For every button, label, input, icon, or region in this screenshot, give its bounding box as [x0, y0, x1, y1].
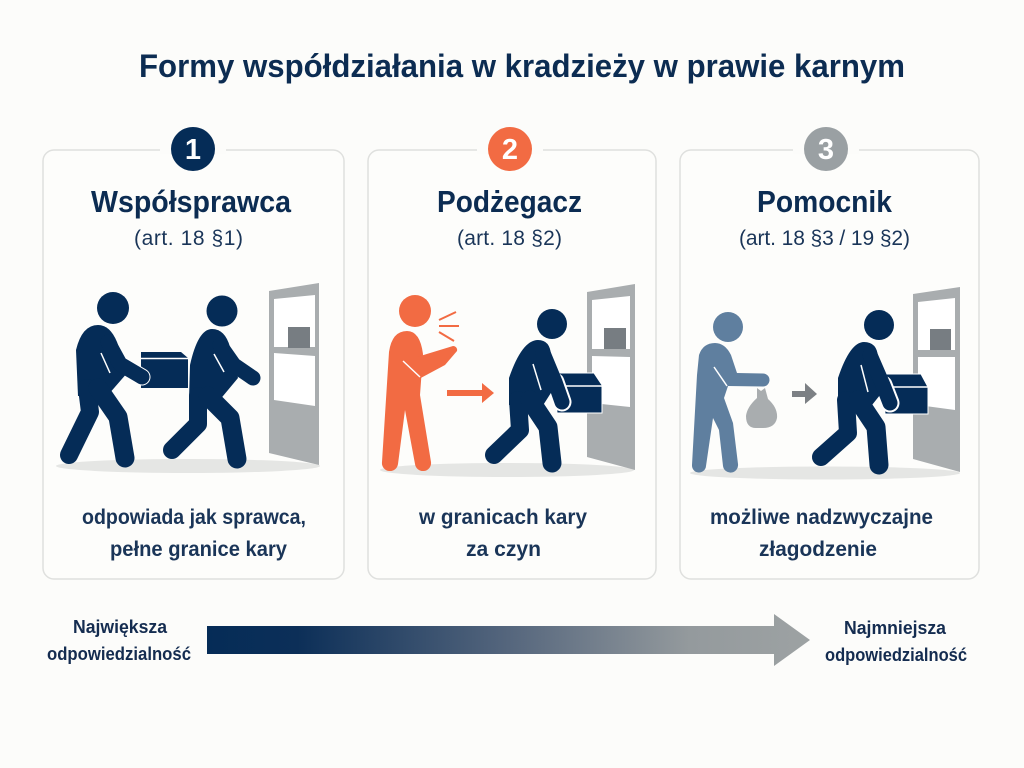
heading: Podżegacz: Podżegacz — [437, 184, 582, 219]
illustration: two people carrying a box — [56, 283, 320, 473]
article reference 2: (art. 18 §2) — [457, 227, 562, 250]
thief carrying box — [821, 310, 928, 465]
thief carrying box — [494, 309, 602, 463]
person left — [69, 292, 142, 458]
left label: greatest responsibility — [47, 617, 191, 664]
badge 3 — [804, 127, 848, 171]
illustration: instigator pointing at thief — [380, 284, 635, 477]
helper figure — [692, 312, 770, 473]
arrow: responsibility scale — [207, 614, 810, 666]
speech lines — [439, 312, 459, 341]
description 3 — [710, 506, 933, 561]
left label: greatest responsibility: odpowiedzialność — [47, 644, 191, 664]
description 2: za czyn — [466, 538, 541, 561]
badge 3: 3 — [818, 134, 834, 166]
arrow: gray — [792, 383, 817, 404]
panel: podżegacz — [368, 127, 656, 579]
instigator figure — [382, 295, 457, 471]
shelf — [587, 284, 635, 470]
shelf — [913, 287, 960, 472]
title: Formy współdziałania w kradzieży w prawie karnym — [139, 48, 905, 84]
right label: least responsibility: odpowiedzialność — [825, 645, 967, 665]
description 1: odpowiada jak sprawca, — [82, 506, 306, 529]
description 2 — [418, 506, 587, 561]
article reference 3: (art. 18 §3 / 19 §2) — [739, 227, 910, 250]
heading: Współsprawca: Współsprawca — [91, 184, 292, 219]
right label: least responsibility: Najmniejsza — [844, 618, 947, 638]
shelf — [269, 283, 319, 465]
description 2: w granicach kary — [418, 506, 587, 529]
description 3: złagodzenie — [759, 538, 877, 561]
left label: greatest responsibility: Największa — [73, 617, 168, 637]
description 1 — [82, 506, 306, 561]
article reference 1: (art. 18 §1) — [134, 227, 243, 250]
badge 2 — [488, 127, 532, 171]
heading: Pomocnik: Pomocnik — [757, 184, 893, 219]
description 1: pełne granice kary — [110, 538, 287, 561]
carried box — [141, 352, 188, 388]
panel: współsprawca — [43, 127, 344, 579]
description 3: możliwe nadzwyczajne — [710, 506, 933, 529]
badge 2: 2 — [502, 134, 518, 166]
badge 1 — [171, 127, 215, 171]
right label: least responsibility — [825, 618, 967, 665]
icon: bag — [746, 388, 777, 428]
illustration: helper with bag and thief — [690, 287, 960, 480]
panel: pomocnik — [680, 127, 979, 579]
badge 1: 1 — [185, 134, 201, 166]
arrow: orange — [447, 383, 494, 403]
person right — [172, 296, 253, 459]
